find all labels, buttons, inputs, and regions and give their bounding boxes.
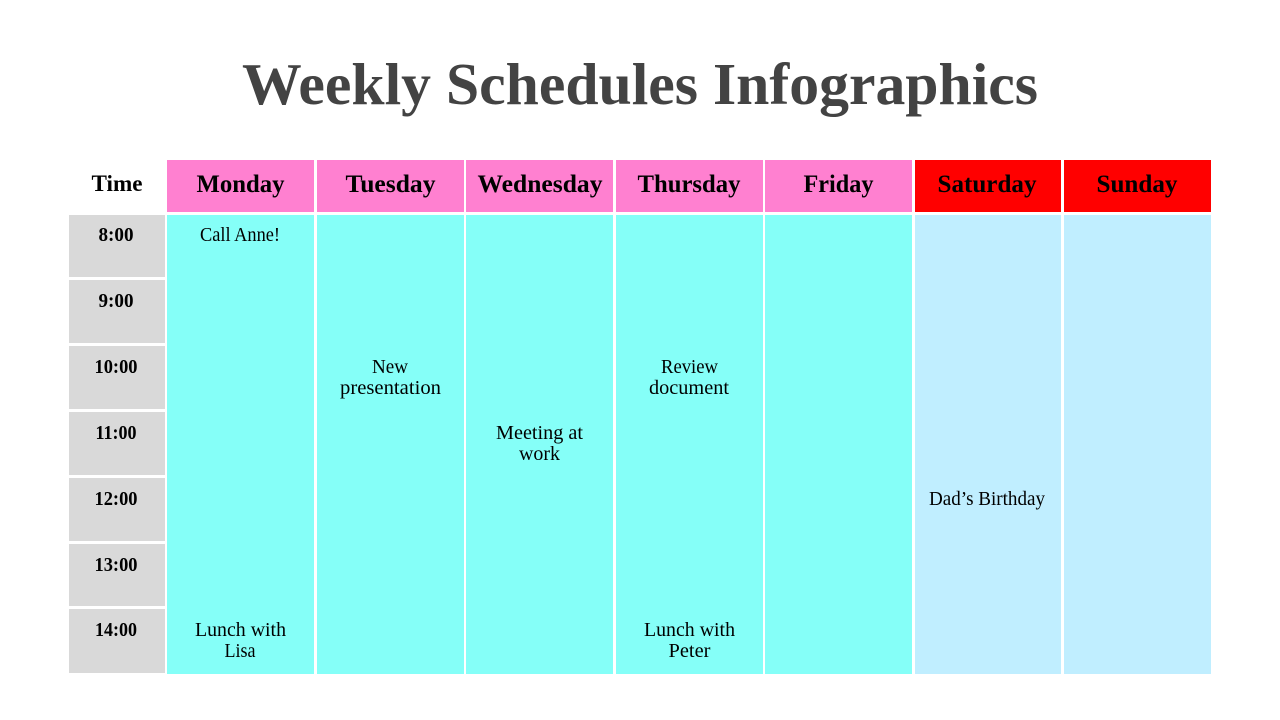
event: Lunch with Lisa [195,620,286,662]
schedule table [69,160,1211,674]
event: Meeting at work [496,423,584,465]
event: Lunch with Peter [644,620,735,662]
time slot 9:00 [69,280,165,343]
header: Sunday [1064,160,1211,212]
event: Lunch with Peter: Lunch with [644,620,735,641]
event: New presentation: New [372,357,408,378]
event: Lunch with Lisa: Lisa [224,641,256,662]
time slot 10:00: 10:00 [94,357,138,378]
time slot 13:00 [69,544,165,606]
header: Tuesday: Tuesday [346,171,436,198]
header: Wednesday: Wednesday [478,171,603,198]
column: Tuesday [317,215,464,674]
event: Call Anne: Call Anne! [200,225,280,246]
header: Thursday: Thursday [638,171,741,198]
column: Friday [765,215,912,674]
header: Tuesday [317,160,464,212]
event: Meeting at work: Meeting at [496,423,584,444]
header: Friday [765,160,912,212]
header: Sunday: Sunday [1096,171,1178,198]
time slot 10:00 [69,346,165,409]
time slot 9:00: 9:00 [98,291,134,312]
column: Monday [167,215,314,674]
header: Monday: Monday [196,171,285,198]
header: Saturday: Saturday [938,171,1037,198]
header: Friday: Friday [804,171,874,198]
event: Review document: Review [661,357,718,378]
time slot 11:00: 11:00 [96,423,136,444]
event: Meeting at work: work [519,444,560,465]
column: Sunday [1064,215,1211,674]
time slot 13:00: 13:00 [94,555,138,576]
header: Monday [167,160,314,212]
column: Saturday [915,215,1061,674]
header: Time: Time [92,171,142,196]
column: Wednesday [466,215,613,674]
event: New presentation: presentation [340,378,441,399]
event: Lunch with Peter: Peter [668,641,711,662]
event: Review document: document [649,378,730,399]
time slot 8:00 [69,215,165,277]
time slot 14:00 [69,609,165,673]
time slot 14:00: 14:00 [95,620,137,641]
event: Review document [649,357,730,399]
time slot 12:00: 12:00 [94,489,138,510]
event: New presentation [340,357,441,399]
event: Lunch with Lisa: Lunch with [195,620,286,641]
time slot 8:00: 8:00 [98,225,134,246]
event: Dad's Birthday: Dad’s Birthday [929,489,1045,510]
header: Thursday [616,160,763,212]
column: Thursday [616,215,763,674]
header: Wednesday [466,160,613,212]
time slot 11:00 [69,412,165,475]
time slot 12:00 [69,478,165,541]
title: Weekly Schedules Infographics [242,51,1038,117]
header: Saturday [915,160,1061,212]
